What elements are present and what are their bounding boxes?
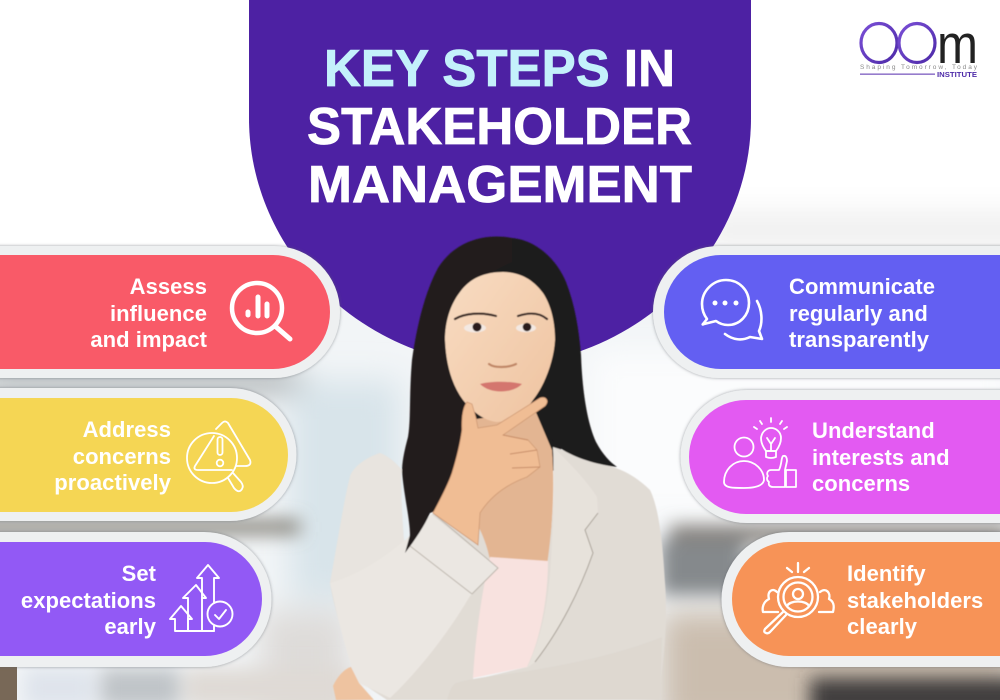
pill label <box>847 561 983 639</box>
pill label: concerns <box>73 444 171 469</box>
title line 1: KEY STEPS IN <box>324 40 675 98</box>
jacket body <box>330 447 666 700</box>
pill: set expectations early <box>0 532 272 667</box>
icon: person, bulb and thumbs up <box>724 418 796 488</box>
pill: understand interests and concerns <box>680 390 1000 523</box>
pill casing <box>722 532 1000 667</box>
left upper arm highlight <box>330 453 405 584</box>
icon: speech bubbles <box>702 280 762 339</box>
hair behind neck <box>450 240 570 480</box>
pill label: Identify <box>847 561 926 586</box>
pill: address concerns proactively <box>0 388 296 521</box>
right lapel <box>527 447 598 668</box>
pill label: Assess <box>130 274 207 299</box>
logo letter m: m <box>937 13 978 75</box>
pill casing <box>653 246 1000 378</box>
pill label: Understand <box>812 418 935 443</box>
icon: rising arrows with check <box>170 565 232 631</box>
hair right side <box>500 238 617 467</box>
hand and wrist <box>433 397 547 545</box>
title line 3: MANAGEMENT <box>308 156 692 214</box>
pill label: expectations <box>21 588 156 613</box>
lower right sleeve <box>447 637 662 700</box>
pill body <box>732 542 1000 656</box>
eyes <box>464 322 536 332</box>
face <box>445 272 555 422</box>
pill label: early <box>104 614 157 639</box>
icon: magnifier over people <box>763 563 834 633</box>
pill label <box>812 418 950 496</box>
mouth <box>480 382 522 392</box>
pill casing <box>680 390 1000 523</box>
pill: assess influence and impact <box>0 246 340 378</box>
finger lines <box>503 435 540 468</box>
pill casing <box>0 532 272 667</box>
pill label: Communicate <box>789 274 935 299</box>
pill: identify stakeholders clearly <box>722 532 1000 667</box>
logo institute label: INSTITUTE <box>937 70 977 79</box>
pill label <box>54 417 172 495</box>
pill label <box>789 274 935 352</box>
pill casing <box>0 388 296 521</box>
lapel outline <box>535 513 598 662</box>
pill: communicate regularly and transparently <box>653 246 1000 378</box>
icon dots <box>712 300 738 306</box>
logo tagline: Shaping Tomorrow, Today <box>860 64 978 71</box>
icon: warning triangle with magnifier <box>187 422 250 491</box>
nose <box>489 364 516 367</box>
pill label: interests and <box>812 445 950 470</box>
pill body <box>0 398 288 512</box>
pill body <box>689 400 1000 514</box>
pill label: regularly and <box>789 301 928 326</box>
hair left side <box>402 237 512 553</box>
pill label: Set <box>122 561 157 586</box>
icon: magnifier with bars <box>232 283 290 339</box>
title <box>307 40 692 214</box>
pill body <box>0 542 262 656</box>
logo rings <box>861 24 935 62</box>
eyebrows <box>455 314 547 319</box>
pill label: and impact <box>90 327 208 352</box>
person <box>330 237 666 700</box>
pill label <box>21 561 157 639</box>
pill casing <box>0 246 340 378</box>
logo: OOm Institute <box>860 13 978 79</box>
pill body <box>664 255 1000 369</box>
neck and chest <box>466 410 553 562</box>
pill label: stakeholders <box>847 588 983 613</box>
purple title shape <box>249 0 751 366</box>
pill label: Address <box>83 417 171 442</box>
title line 2: STAKEHOLDER <box>307 98 692 156</box>
forearm sleeve <box>330 514 498 698</box>
pill body <box>0 255 330 369</box>
pill label: proactively <box>54 470 172 495</box>
pill label: concerns <box>812 471 910 496</box>
pill label: influence <box>110 301 207 326</box>
pill label: clearly <box>847 614 918 639</box>
sleeve cuff line <box>410 513 498 594</box>
pill label: transparently <box>789 327 930 352</box>
blouse <box>473 557 548 678</box>
pill label <box>90 274 208 352</box>
folded hand <box>333 667 374 700</box>
